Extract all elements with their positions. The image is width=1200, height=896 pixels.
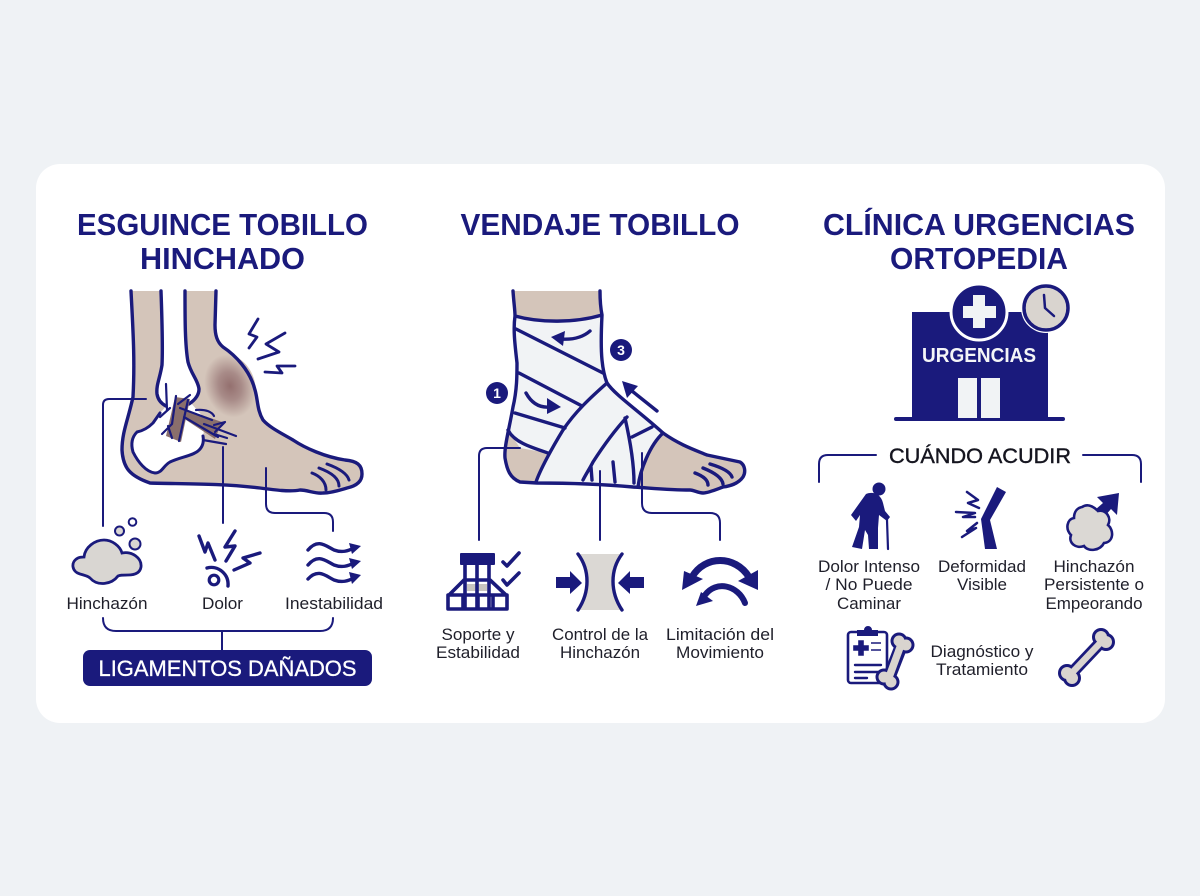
heading: bandage: VENDAJE TOBILLO — [460, 207, 740, 242]
connector lines — [479, 448, 720, 540]
illustration: bandaged ankle — [486, 291, 745, 493]
icon: pain — [199, 531, 260, 586]
icon: instability — [308, 543, 361, 584]
icon: bone — [1058, 628, 1115, 687]
label: instability: Inestabilidad — [285, 595, 383, 613]
heading: sprain: ESGUINCE TOBILLO — [77, 207, 368, 242]
label: swelling control — [552, 626, 649, 662]
heading: when to go: CUÁNDO ACUDIR — [889, 443, 1071, 468]
label: diagnosis — [930, 643, 1034, 679]
icon: support — [448, 553, 519, 609]
label: intense pain — [818, 558, 920, 613]
icon: swelling cloud — [73, 518, 141, 584]
toes — [312, 464, 349, 490]
label: movement limit — [666, 626, 774, 662]
icon: hospital building: URGENCIAS — [922, 345, 1036, 367]
label: worsening swelling: Hinchazón — [1054, 558, 1134, 576]
step badge 3 — [610, 339, 632, 361]
label: intense pain: / No Puede — [826, 576, 912, 594]
icon: person with cane — [851, 482, 890, 549]
label: diagnosis: Diagnóstico y — [930, 643, 1034, 661]
label: intense pain: Dolor Intenso — [818, 558, 920, 576]
connector lines — [103, 399, 333, 650]
step badge 1 — [486, 382, 508, 404]
label: deformity: Visible — [957, 576, 1007, 594]
label: support: Estabilidad — [436, 644, 520, 662]
icon: deformity — [956, 487, 1006, 549]
label: diagnosis: Tratamiento — [936, 661, 1028, 679]
icon: movement limit — [682, 560, 758, 606]
label: intense pain: Caminar — [837, 595, 902, 613]
heading: clinic: ORTOPEDIA — [890, 241, 1068, 276]
section bracket — [819, 455, 1141, 482]
label: swelling control: Hinchazón — [560, 644, 640, 662]
label: worsening swelling — [1044, 558, 1144, 613]
pain sparks — [249, 319, 295, 373]
step badge 3: 3 — [617, 342, 625, 358]
label: worsening swelling: Empeorando — [1046, 595, 1142, 613]
label: movement limit: Movimiento — [676, 644, 764, 662]
icon: hospital building — [894, 283, 1071, 421]
icon: worsening swelling — [1067, 493, 1119, 550]
label: support: Soporte y — [442, 626, 515, 644]
badge: damaged ligaments — [83, 650, 372, 686]
label: pain: Dolor — [202, 595, 244, 613]
label: support — [436, 626, 520, 662]
heading: clinic: CLÍNICA URGENCIAS — [823, 207, 1135, 242]
label: swelling control: Control de la — [552, 626, 649, 644]
label: swelling: Hinchazón — [66, 595, 148, 613]
panel: sprain — [66, 207, 383, 686]
heading: clinic — [823, 207, 1135, 276]
heading: sprain — [77, 207, 368, 276]
panel: emergency clinic — [818, 207, 1144, 690]
icon: clipboard and bone — [848, 626, 914, 690]
heading: sprain: HINCHADO — [140, 241, 305, 276]
label: movement limit: Limitación del — [666, 626, 774, 644]
step arrows — [526, 331, 657, 414]
badge: damaged ligaments: LIGAMENTOS DAÑADOS — [98, 656, 356, 681]
label: deformity — [938, 558, 1026, 594]
label: worsening swelling: Persistente o — [1044, 576, 1144, 594]
illustration: swollen ankle — [122, 291, 362, 493]
label: deformity: Deformidad — [938, 558, 1026, 576]
icon: swelling control — [556, 554, 644, 610]
step badge 1: 1 — [493, 385, 501, 401]
main white panel — [36, 164, 1165, 723]
panel: bandage — [436, 207, 774, 662]
